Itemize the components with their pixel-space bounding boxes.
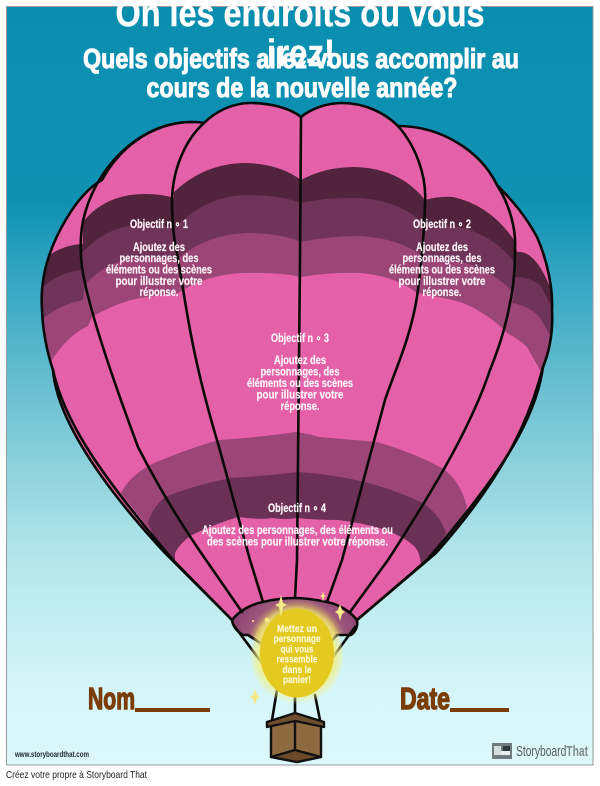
upper band: pink below — [52, 272, 541, 420]
title: irez! — [267, 33, 335, 75]
text block: objectif 4: Objectif n ∘ 4 — [268, 503, 326, 515]
date field: Date — [400, 681, 450, 716]
text block: objectif 3: Objectif n ∘ 3 — [271, 333, 329, 345]
text block: objectif 1: pour illustrer votre — [116, 276, 202, 288]
glow around the character bubble — [251, 603, 343, 707]
text block: objectif 2 — [389, 219, 495, 299]
name field: Nom — [88, 681, 135, 716]
text block: objectif 4: des scènes pour illustrer votre réponse. — [207, 536, 388, 548]
hot air balloon — [30, 95, 570, 762]
text block: objectif 2: éléments ou des scènes — [389, 264, 495, 276]
balloon envelope colour bands — [42, 104, 551, 618]
balloon seams — [42, 103, 552, 620]
text block: objectif 3: éléments ou des scènes — [247, 378, 353, 390]
sparkles — [250, 591, 345, 705]
text block: objectif 3: personnages, des — [260, 366, 340, 378]
text block: objectif 2: personnages, des — [402, 253, 482, 265]
character bubble: Mettez un — [277, 623, 317, 635]
text block: objectif 1: Objectif n ∘ 1 — [130, 219, 188, 231]
character bubble: panier! — [283, 674, 311, 686]
skirt of the balloon — [232, 598, 357, 648]
text block: objectif 2: Ajoutez des — [416, 242, 468, 254]
basket — [267, 713, 324, 762]
text block: objectif 3: pour illustrer votre — [256, 390, 344, 402]
subtitle question: cours de la nouvelle année? — [146, 72, 458, 103]
text block: objectif 2: Objectif n ∘ 2 — [413, 219, 471, 231]
text block: objectif 1: Ajoutez des — [133, 242, 185, 254]
website url: www.storyboardthat.com — [14, 750, 89, 759]
logo: StoryboardThat — [492, 743, 588, 760]
upper band: darkest — [44, 163, 551, 305]
text block: objectif 1: réponse. — [140, 287, 178, 299]
title — [116, 0, 484, 75]
name field — [88, 681, 210, 716]
character bubble: ressemble — [276, 654, 318, 666]
text block: objectif 4 — [202, 503, 393, 548]
lower band: light — [121, 432, 467, 543]
upper band: light — [44, 233, 550, 370]
text block: objectif 4: Ajoutez des personnages, des éléments ou — [202, 525, 393, 537]
lower band: pink below — [175, 517, 421, 580]
subtitle question — [83, 43, 519, 103]
date field — [400, 681, 509, 716]
footer caption: Créez votre propre à Storyboard That — [6, 769, 147, 781]
character bubble: qui vous — [280, 644, 314, 656]
text block: objectif 1: éléments ou des scènes — [106, 264, 212, 276]
text block: objectif 2: pour illustrer votre — [398, 276, 486, 288]
text block: objectif 3: réponse. — [280, 401, 320, 413]
character bubble: dans le — [282, 664, 312, 676]
text block: objectif 1: personnages, des — [120, 253, 198, 265]
lower band: dark — [148, 472, 446, 564]
text block: objectif 2: réponse. — [422, 287, 462, 299]
upper band: middle — [43, 195, 551, 334]
text block: objectif 3: Ajoutez des — [274, 355, 326, 367]
character bubble: personnage — [274, 633, 321, 645]
ropes to the basket — [235, 627, 355, 720]
subtitle question: Quels objectifs allez-vous accomplir au — [83, 43, 519, 74]
logo: StoryboardThat: StoryboardThat — [516, 744, 588, 760]
character bubble — [260, 608, 334, 698]
text block: objectif 3 — [247, 333, 353, 413]
text block: objectif 1 — [106, 219, 212, 299]
